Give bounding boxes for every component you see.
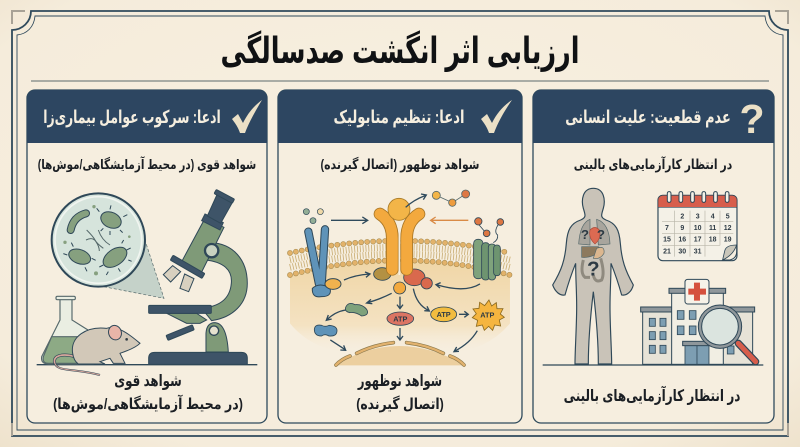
calendar: 2 [680,213,684,220]
magnified view [52,193,164,298]
calendar: 7 [665,225,669,232]
pathway arrows [326,194,480,352]
ATP badges: ATP [437,310,451,319]
blue receptor [303,209,341,297]
evidence subheading: شواهد قوی (در محیط آزمایشگاهی/موش‌ها) [38,156,256,173]
icon: check mark [481,100,512,133]
caption: strong evidence detail: (در محیط آزمایشگاهی/موش‌ها) [53,395,243,413]
calendar: 19 [724,237,732,244]
evidence subheading: در انتظار کارآزمایی‌های بالینی [574,156,732,172]
ATP badges: ATP [393,314,407,323]
header: metabolic regulation [278,90,522,143]
ATP badges [387,300,504,330]
calendar: 9 [680,225,684,232]
heading: pathogen suppression: ادعا: سرکوب عوامل بیماری‌زا [43,108,221,128]
human body: ? [597,227,605,242]
ground line [543,363,763,367]
panel: human causality uncertainty [533,90,774,423]
heading: human causality uncertainty: عدم قطعیت: علیت انسانی [565,108,731,128]
calendar: 12 [724,225,732,232]
caption: receptor binding: (اتصال گیرنده) [356,395,444,413]
human body: ? [581,227,589,242]
mouse [54,324,140,375]
calendar [658,192,737,261]
panel: metabolic regulation [278,90,522,423]
ground line [37,363,257,367]
heading: metabolic regulation: ادعا: تنظیم متابولیک [334,108,464,128]
hospital [641,279,755,364]
microscope [149,189,247,364]
organs [579,219,610,245]
cytoplasm [290,260,510,353]
calendar: 18 [709,237,717,244]
calendar: 3 [696,213,700,220]
calendar: 10 [694,225,702,232]
calendar: 30 [678,249,686,256]
evidence subheading: شواهد نوظهور (اتصال گیرنده) [321,156,479,172]
ligand chain [432,190,470,206]
panel: pathogen suppression [27,90,267,423]
ATP badges: ATP [480,310,494,319]
lipid bilayer [290,241,510,275]
calendar: 16 [678,237,686,244]
diagram: receptor signaling [290,190,510,365]
calendar: 15 [663,237,671,244]
calendar: 17 [694,237,702,244]
icon: check mark [232,100,262,133]
illustration: body calendar hospital [543,188,763,365]
caption: strong evidence: شواهد قوی [114,371,182,391]
illustration: microscope mouse flask [37,189,257,375]
kinase blobs [314,303,368,336]
calendar: 5 [726,213,730,220]
human body [553,188,633,364]
magnifying glass [700,307,756,362]
nucleus [335,343,465,365]
green transporter [474,218,504,280]
orange receptor [374,198,432,289]
calendar: 11 [709,225,716,232]
caption: awaiting clinical trials: در انتظار کارآزمایی‌های بالینی [564,385,740,404]
title: ارزیابی اثر انگشت صدسالگی [220,30,580,72]
header: human causality uncertainty [533,90,774,143]
header: pathogen suppression [27,90,267,143]
calendar: 21 [663,249,671,256]
calendar: 4 [711,213,715,220]
icon: question mark: ? [739,96,765,142]
human body: ? [587,258,600,281]
calendar: 31 [694,249,702,256]
signal node [394,282,406,294]
caption: emerging evidence: شواهد نوظهور [357,371,442,391]
flask [42,296,93,364]
